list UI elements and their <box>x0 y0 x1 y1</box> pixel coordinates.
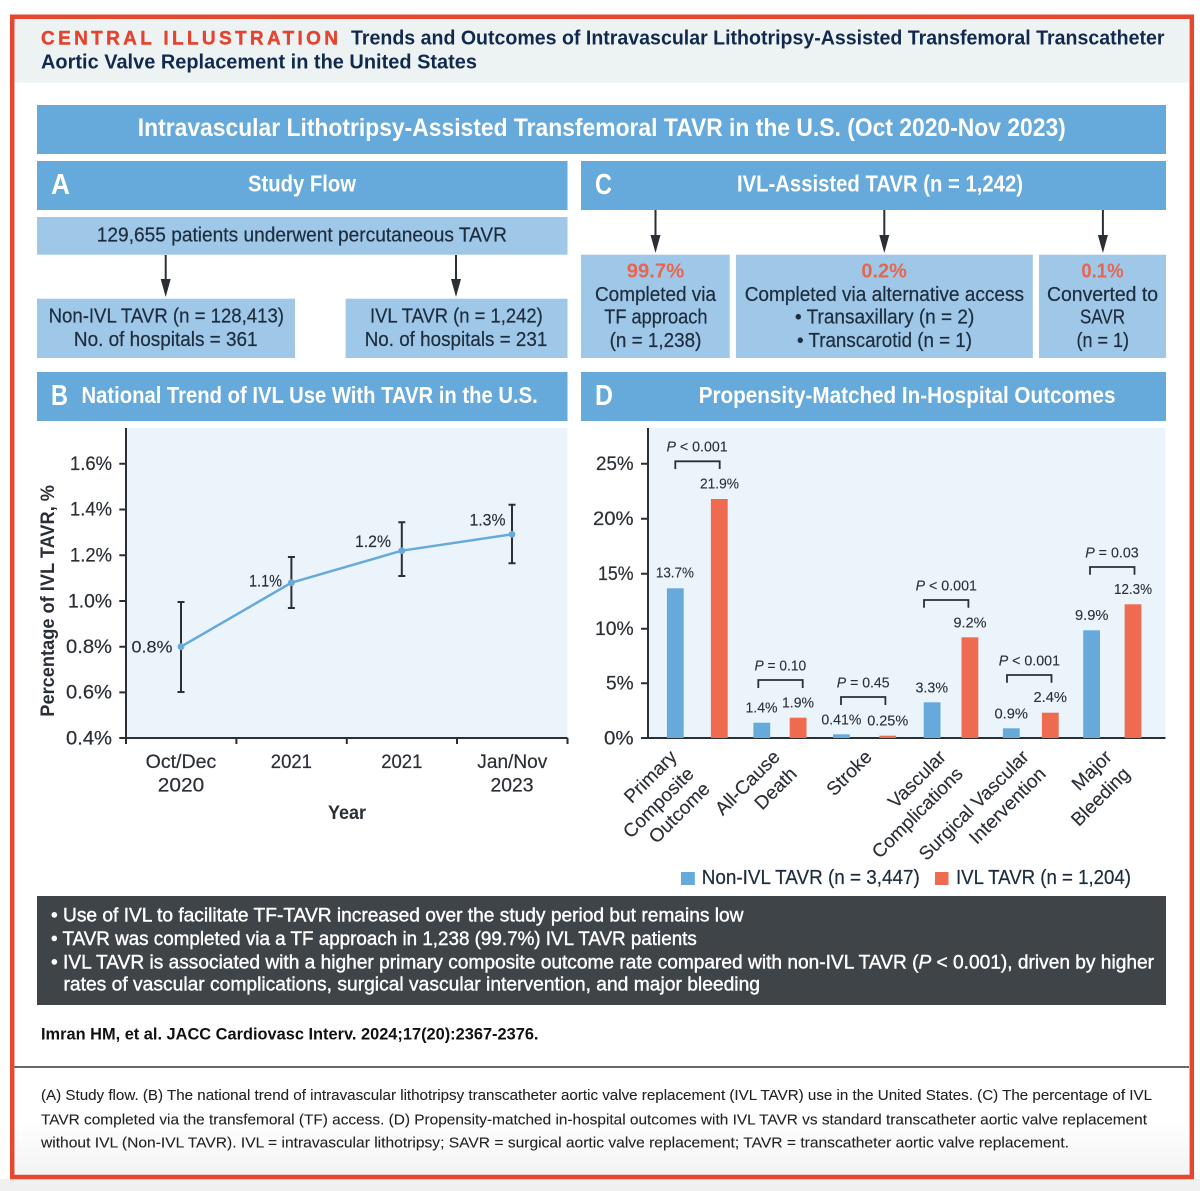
y axis labels: 5% <box>606 674 634 695</box>
box: alternative access <box>736 255 1033 358</box>
value labels: 12.3% <box>1114 582 1152 598</box>
box: alternative access: Completed via alternative access <box>745 284 1024 306</box>
y axis labels: 10% <box>595 619 634 640</box>
p values: P < 0.001 <box>916 578 977 594</box>
box: TF approach: 99.7% <box>627 261 684 283</box>
panel A: study flow: A <box>51 169 70 201</box>
figure caption: without IVL (Non-IVL TAVR). IVL = intravascular lithotripsy; SAVR = surgical aortic valve replacement; TAVR = transcatheter aortic valve replacement. <box>40 1134 1069 1151</box>
arrow: to SAVR <box>1098 210 1108 253</box>
line chart <box>38 428 568 824</box>
y axis labels: 0% <box>604 728 634 749</box>
significance brackets <box>675 461 1134 705</box>
y axis labels: 0.8% <box>66 637 112 658</box>
x axis labels: 2020 <box>158 776 204 797</box>
x axis labels: 2023 <box>490 776 534 797</box>
arrow: to non-IVL <box>161 255 171 297</box>
y axis labels <box>66 454 112 749</box>
category labels: All-Cause <box>711 747 785 820</box>
error bars <box>178 505 516 692</box>
p values: P = 0.10 <box>754 659 806 675</box>
arrow: to TF approach <box>650 210 660 253</box>
data labels: 1.1% <box>249 572 282 591</box>
arrow: to IVL <box>451 255 461 297</box>
value labels: 3.3% <box>916 680 948 696</box>
box: all patients: 129,655 patients underwent percutaneous TAVR <box>97 225 507 247</box>
y axis labels: 0.6% <box>66 683 112 704</box>
heading B <box>37 372 568 421</box>
legend: IVL TAVR (n = 1,204) <box>956 867 1131 889</box>
x axis labels: Oct/Dec <box>146 752 216 773</box>
category labels: Outcome <box>645 779 715 848</box>
value labels <box>656 476 1152 729</box>
p values: P = 0.45 <box>837 676 890 692</box>
p values: P < 0.001 <box>999 653 1060 669</box>
figure caption <box>40 1087 1152 1151</box>
key takeaways box: • IVL TAVR is associated with a higher primary composite outcome rate compared with non-IVL TAVR ( P < 0.001), driven by higher <box>51 952 1155 973</box>
data labels: 1.2% <box>355 532 391 551</box>
box: TF approach: (n = 1,238) <box>610 330 701 352</box>
box: converted to SAVR: Converted to <box>1047 284 1158 306</box>
box: TF approach: Completed via <box>595 284 717 306</box>
panel C: IVL-assisted TAVR: IVL-Assisted TAVR (n = 1,242) <box>737 171 1023 197</box>
y axis labels: 1.0% <box>68 591 112 612</box>
box: alternative access: 0.2% <box>861 261 907 283</box>
x axis labels: Jan/Nov <box>477 752 548 773</box>
value labels: 2.4% <box>1034 690 1067 706</box>
panel A: study flow <box>37 161 568 358</box>
y axis labels: 1.4% <box>70 500 112 521</box>
data labels: 0.8% <box>132 638 172 656</box>
box: non-IVL TAVR: Non-IVL TAVR (n = 128,413) <box>49 306 284 328</box>
panel D: in-hospital outcomes <box>581 372 1166 889</box>
panel B: national trend <box>37 372 568 824</box>
value labels: 9.9% <box>1075 608 1109 624</box>
category labels: Death <box>751 764 802 814</box>
category labels: Intervention <box>965 764 1051 849</box>
value labels: 0.41% <box>821 712 861 728</box>
x axis labels <box>146 752 548 797</box>
figure caption: (A) Study flow. (B) The national trend of intravascular lithotripsy transcatheter aortic valve replacement (IVL TAVR) use in the United States. (C) The percentage of IVL <box>41 1087 1152 1104</box>
category labels: Bleeding <box>1067 764 1135 831</box>
box: TF approach <box>581 255 730 358</box>
title band: CENTRAL ILLUSTRATION <box>41 28 338 49</box>
IVL bars <box>711 499 1141 738</box>
title band <box>14 19 1189 82</box>
category labels <box>619 746 1135 865</box>
box: IVL TAVR: IVL TAVR (n = 1,242) <box>370 306 543 328</box>
category labels: Primary <box>620 746 682 808</box>
box: TF approach: TF approach <box>604 306 708 328</box>
panel A: study flow: Study Flow <box>248 171 356 197</box>
main heading bar: Intravascular Lithotripsy-Assisted Transfemoral TAVR in the U.S. (Oct 2020-Nov 2023) <box>138 114 1066 142</box>
legend <box>681 867 1131 889</box>
figure caption: TAVR completed via the transfemoral (TF) access. (D) Propensity-matched in-hospital outcomes with IVL TAVR vs standard transcatheter aortic valve replacement <box>41 1111 1148 1128</box>
box: IVL TAVR: No. of hospitals = 231 <box>365 329 547 351</box>
category labels: Composite <box>619 764 699 843</box>
heading B: B <box>51 380 68 412</box>
heading D: Propensity-Matched In-Hospital Outcomes <box>699 382 1116 408</box>
key takeaways box: • TAVR was completed via a TF approach in 1,238 (99.7%) IVL TAVR patients <box>51 929 697 950</box>
legend: Non-IVL TAVR (n = 3,447) <box>702 867 920 889</box>
category labels: Stroke <box>823 747 877 800</box>
box: non-IVL TAVR: No. of hospitals = 361 <box>74 329 258 351</box>
bar chart <box>593 428 1166 889</box>
title band: Trends and Outcomes of Intravascular Lithotripsy-Assisted Transfemoral Transcatheter <box>351 26 1165 49</box>
p values <box>666 440 1139 692</box>
data labels: 1.3% <box>470 511 506 530</box>
y axis labels: 25% <box>596 454 634 475</box>
arrow: to alternative access <box>879 210 889 253</box>
category labels: Surgical Vascular <box>915 746 1034 865</box>
box: converted to SAVR: SAVR <box>1080 306 1125 328</box>
x axis labels: 2021 <box>381 752 422 773</box>
key takeaways box: • Use of IVL to facilitate TF-TAVR increased over the study period but remains low <box>51 906 744 927</box>
box: converted to SAVR: 0.1% <box>1081 261 1124 283</box>
y axis labels: 0.4% <box>66 728 112 749</box>
title band: Aortic Valve Replacement in the United States <box>41 51 477 74</box>
box: converted to SAVR <box>1039 255 1166 358</box>
value labels: 0.25% <box>867 713 908 729</box>
trend line <box>178 531 515 650</box>
key takeaways box <box>37 896 1166 1005</box>
x axis labels: 2021 <box>271 752 312 773</box>
value labels: 0.9% <box>994 706 1028 722</box>
y axis labels: 20% <box>593 509 634 530</box>
category labels: Vascular <box>884 746 951 813</box>
box: alternative access: • Transcarotid (n = 1) <box>797 330 972 352</box>
box: non-IVL TAVR <box>37 299 295 358</box>
y axis labels: 15% <box>598 564 634 585</box>
non-IVL bars <box>667 588 1100 738</box>
y axis title: Percentage of IVL TAVR, % <box>38 485 59 717</box>
y axis labels: 1.6% <box>70 454 112 475</box>
box: all patients <box>37 217 568 255</box>
box: alternative access: • Transaxillary (n = 2) <box>795 306 974 328</box>
y axis labels <box>593 454 634 749</box>
category labels: Complications <box>868 764 968 863</box>
y axis labels: 1.2% <box>70 546 112 566</box>
value labels: 1.9% <box>782 696 814 712</box>
box: converted to SAVR: (n = 1) <box>1076 330 1129 352</box>
data labels <box>132 511 506 656</box>
category labels: Major <box>1068 746 1117 795</box>
p values: P = 0.03 <box>1085 545 1139 561</box>
panel C: IVL-assisted TAVR <box>581 161 1166 358</box>
citation: Imran HM, et al. JACC Cardiovasc Interv. 2024;17(20):2367-2376. <box>41 1024 538 1043</box>
value labels: 9.2% <box>954 615 987 631</box>
heading D: D <box>595 380 613 412</box>
p values: P < 0.001 <box>666 440 728 456</box>
key takeaways box: rates of vascular complications, surgical vascular intervention, and major bleeding <box>64 975 760 996</box>
value labels: 21.9% <box>700 476 739 492</box>
heading D <box>581 372 1166 421</box>
value labels: 1.4% <box>746 701 778 717</box>
main heading bar <box>37 105 1166 154</box>
box: IVL TAVR <box>346 299 568 358</box>
x axis title: Year <box>328 803 367 824</box>
panel C: IVL-assisted TAVR: C <box>595 169 612 201</box>
value labels: 13.7% <box>656 566 694 582</box>
heading B: National Trend of IVL Use With TAVR in the U.S. <box>82 382 538 408</box>
